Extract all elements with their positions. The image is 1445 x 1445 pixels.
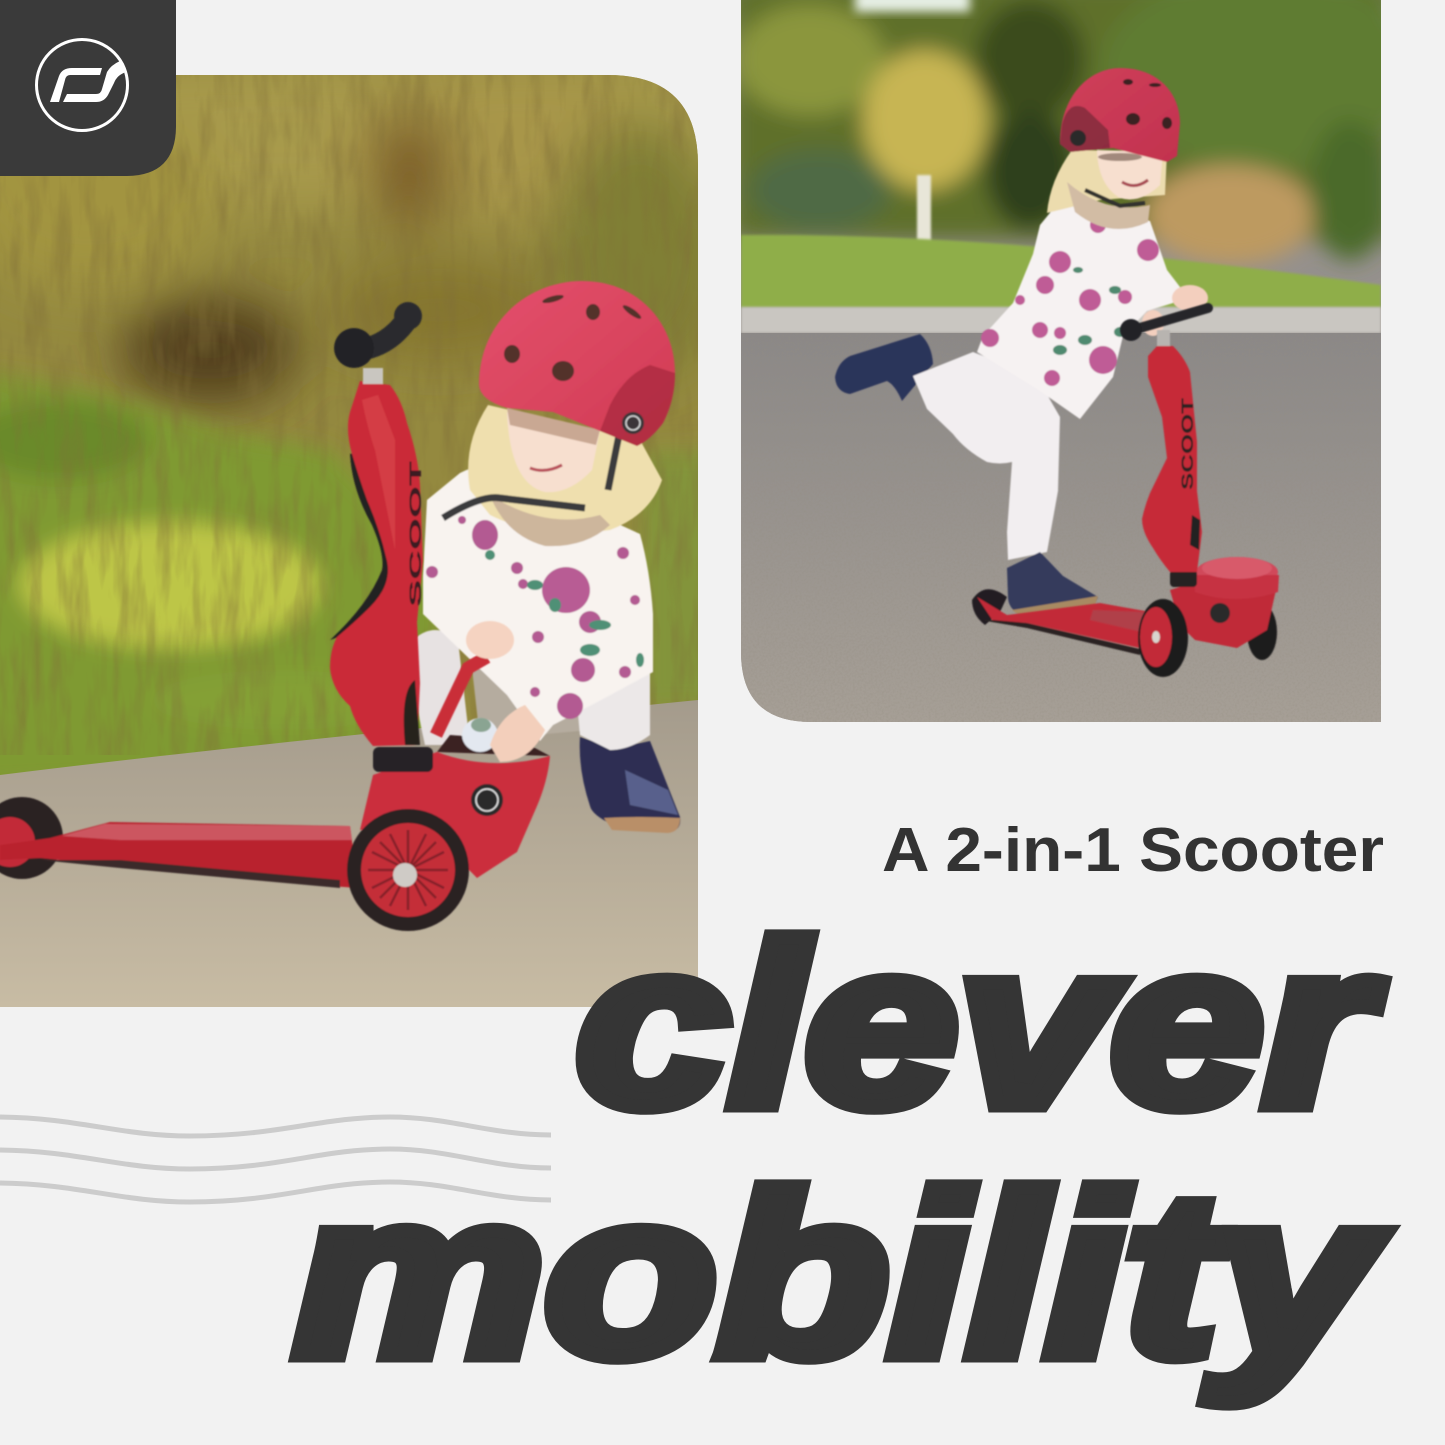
hair — [1047, 150, 1167, 213]
hands — [1142, 310, 1164, 336]
vegetation texture — [0, 75, 698, 755]
rear wheel — [0, 797, 63, 879]
rear wheel behind basket — [1247, 604, 1277, 660]
logo badge — [0, 0, 176, 176]
face — [1097, 150, 1163, 199]
gravel path — [0, 700, 698, 1007]
headline: clever: clever — [576, 896, 1383, 1155]
helmet — [479, 281, 675, 446]
scooter — [0, 302, 550, 931]
chin strap — [443, 430, 620, 518]
photo: child crouching beside red scooter — [0, 60, 750, 1007]
handlebar — [1133, 308, 1208, 330]
stem collar — [373, 747, 433, 772]
boot — [580, 737, 680, 832]
headline: mobility: mobility — [294, 1146, 1386, 1405]
sweater — [423, 467, 653, 741]
scarf — [1067, 182, 1150, 229]
sky — [855, 0, 970, 12]
post — [917, 175, 931, 245]
basket interior — [437, 735, 550, 756]
subtitle: A 2-in-1 Scooter — [882, 816, 1384, 885]
handlebar — [363, 368, 383, 384]
stem — [330, 381, 423, 746]
front wheel — [347, 809, 469, 931]
scooter: SCOOT — [406, 460, 425, 607]
tree background — [731, 0, 1420, 265]
trousers — [413, 630, 470, 745]
helmet — [1060, 68, 1180, 162]
basket handle — [436, 657, 487, 735]
scooter: SCOOT — [1178, 397, 1197, 490]
stem collar — [1170, 570, 1197, 587]
deck — [0, 822, 358, 888]
scooter — [972, 308, 1279, 677]
raised boot — [835, 334, 933, 401]
front wheel — [1138, 599, 1188, 677]
lawn — [741, 235, 1381, 308]
child — [413, 281, 680, 833]
hands — [466, 621, 514, 659]
deck — [977, 597, 1145, 648]
child — [835, 68, 1208, 616]
bottle — [462, 718, 498, 752]
stem — [1142, 346, 1202, 572]
rear fender — [972, 589, 1007, 625]
face — [507, 412, 600, 492]
basket body — [360, 752, 550, 878]
basket — [1170, 581, 1278, 648]
trousers — [913, 352, 1060, 560]
sweater — [977, 197, 1180, 419]
hair — [468, 405, 662, 533]
photo: child riding scooter on road — [731, 0, 1420, 722]
road — [741, 307, 1381, 333]
decorative wave lines — [0, 1117, 551, 1202]
stem black edge — [330, 450, 396, 640]
grass — [0, 370, 720, 790]
standing boot — [1007, 552, 1098, 615]
vegetation background — [0, 60, 750, 405]
scarf — [492, 500, 610, 547]
